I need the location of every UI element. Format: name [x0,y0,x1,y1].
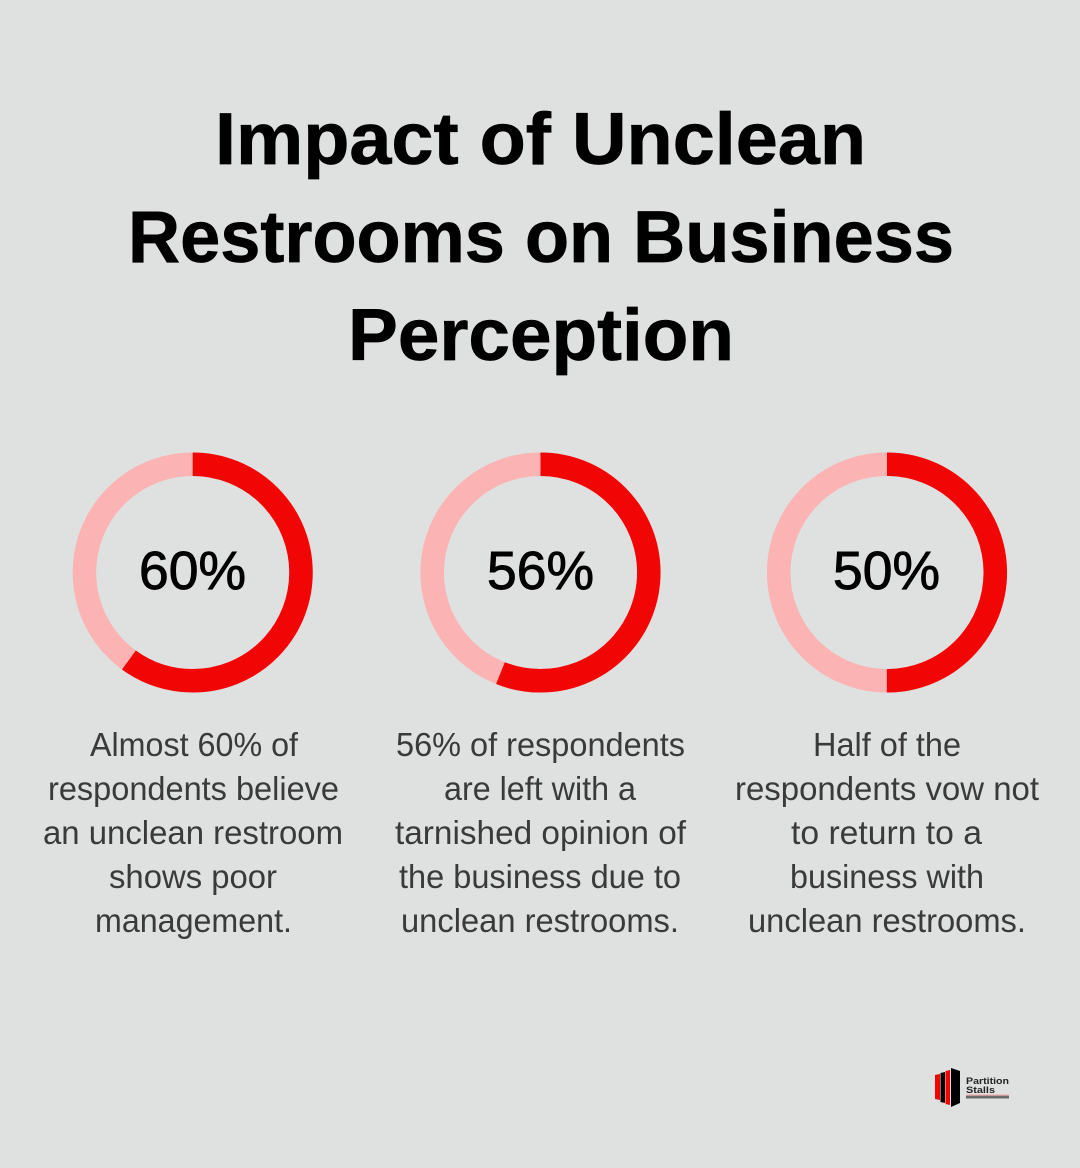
description: 56%: the business due to [399,858,681,895]
description: 50%: to return to a [791,814,983,851]
logo wordmark: Stalls [966,1085,995,1096]
title: Impact of Unclean [215,99,866,180]
description: 50%: business with [790,858,984,895]
value: 50%: 50% [833,541,940,601]
description: 56%: are left with a [444,770,637,807]
panel: 60 percent statistic [43,464,343,939]
title: Perception [348,295,734,376]
description: 56% [395,726,687,939]
description: 50%: respondents vow not [735,770,1039,807]
description: 60%: shows poor [109,858,277,895]
donut chart: 60% [84,464,301,681]
description: 60% [43,726,343,939]
description: 60%: an unclean restroom [43,814,343,851]
logo wordmark [966,1076,1009,1098]
logo wordmark: Partition [966,1076,1009,1087]
description: 56%: 56% of respondents [396,726,685,763]
icon: partition bars [935,1068,960,1107]
description: 60%: Almost 60% of [90,726,299,763]
panel: 56 percent statistic [395,464,687,939]
description: 60%: management. [95,902,292,939]
description: 56%: tarnished opinion of [395,814,687,851]
donut chart: 50% [779,464,995,681]
donut chart: 56% [432,464,649,681]
description: 50% [735,726,1039,939]
value: 56%: 56% [487,541,594,601]
title [128,99,954,376]
logo: Partition Stalls [935,1068,1009,1107]
value: 60%: 60% [139,541,246,601]
description: 50%: unclean restrooms. [748,902,1026,939]
description: 56%: unclean restrooms. [401,902,679,939]
panel: 50 percent statistic [735,464,1039,939]
description: 50%: Half of the [813,726,961,763]
description: 60%: respondents believe [48,770,339,807]
title: Restrooms on Business [128,197,954,278]
